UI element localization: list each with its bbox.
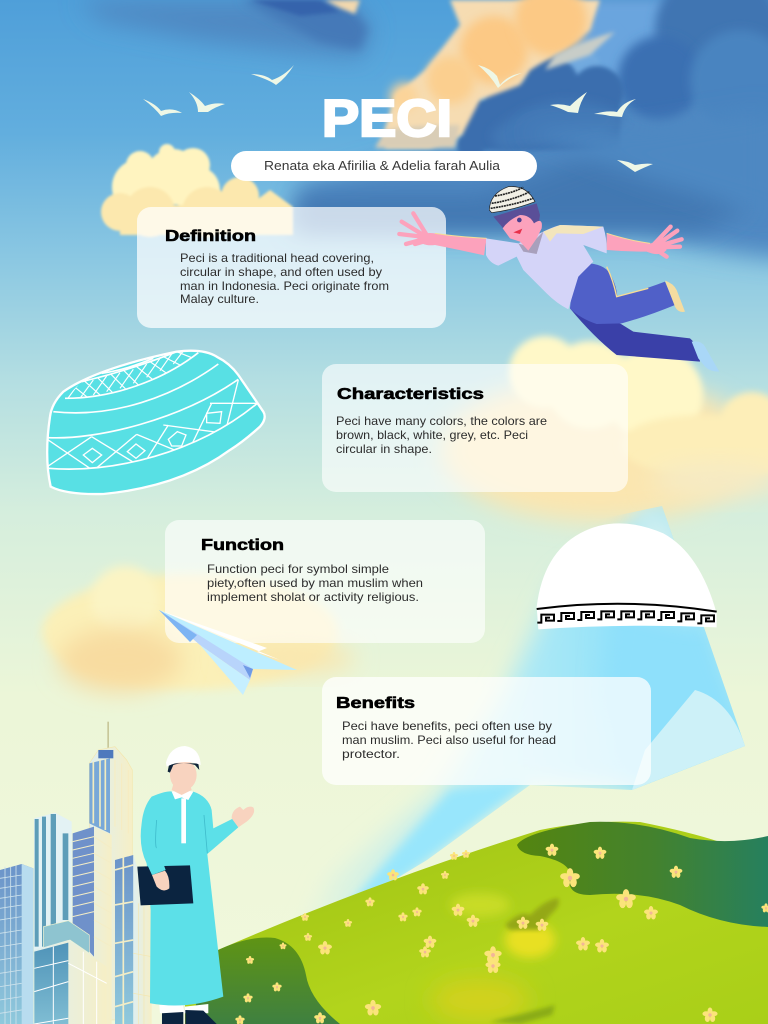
function text: Function peci for symbol simple [207,563,389,576]
definition text [180,252,389,306]
clouds: peach clouds top [375,0,615,148]
panel: characteristics [322,364,628,492]
heading: definition: Definition [165,228,256,245]
icon: white peci cap [537,523,717,629]
function text [207,563,423,604]
title: PECI [322,90,452,148]
clouds: blue cloud top centre [80,0,372,58]
dark green patch right [517,822,768,927]
dark green patch left [190,938,340,1024]
panel: function [165,520,485,643]
definition text: circular in shape, and often used by [180,266,382,279]
light blue sky sweep [320,506,745,908]
benefits text: Peci have benefits, peci often use by [342,720,552,733]
panel: benefits [322,677,651,785]
clouds: cream cloud lower left [42,566,355,692]
heading: characteristics: Characteristics [337,386,484,403]
characteristics text: Peci have many colors, the colors are [336,415,547,428]
author pill [231,151,537,181]
definition text: Malay culture. [180,293,259,306]
benefits text [342,720,556,761]
author pill: Renata eka Afirilia & Adelia farah Aulia [264,158,501,173]
illustration: city buildings [0,722,152,1024]
benefits text: protector. [342,748,400,761]
icon: paper plane [159,610,297,695]
heading: function: Function [201,537,284,554]
clouds: cream cloud upper left [101,144,293,237]
flowers on hill [235,844,768,1024]
birds [143,65,653,172]
definition text: Peci is a traditional head covering, [180,252,374,265]
clouds: blue storm clouds upper right [290,0,768,260]
heading: benefits: Benefits [336,695,415,712]
benefits text: man muslim. Peci also useful for head [342,734,556,747]
characteristics text [336,415,547,456]
clouds: cream cloud right [440,336,768,522]
function text: piety,often used by man muslim when [207,577,423,590]
characteristics text: brown, black, white, grey, etc. Peci [336,429,528,442]
green hill [185,822,768,1024]
character: flying boy with peci [399,187,719,372]
icon: teal peci cap [47,347,265,494]
characteristics text: circular in shape. [336,443,432,456]
panel: definition [137,207,446,328]
definition text: man in Indonesia. Peci originate from [180,280,389,293]
function text: implement sholat or activity religious. [207,591,419,604]
character: man in teal robe [137,746,254,1024]
